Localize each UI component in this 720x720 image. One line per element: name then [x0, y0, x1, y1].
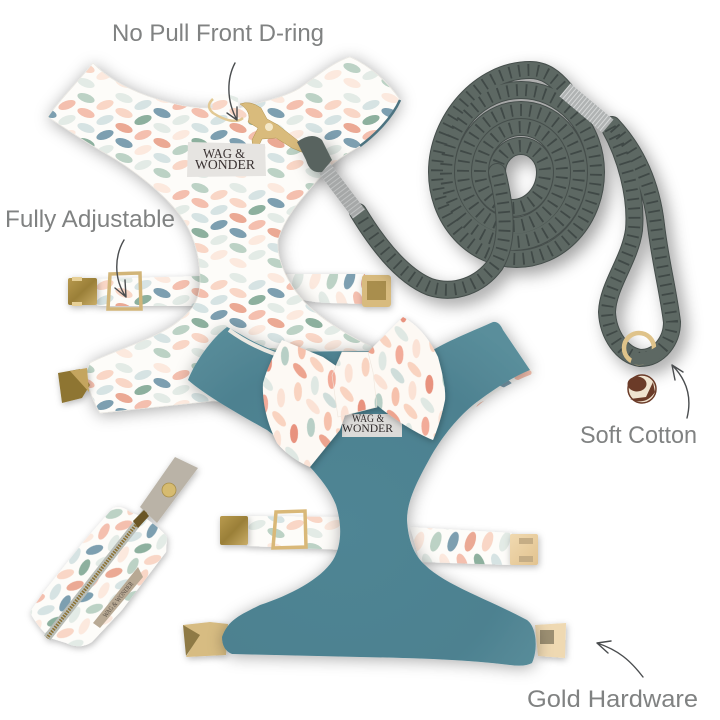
bow [263, 317, 445, 467]
zipper teeth [47, 512, 146, 638]
buckle: bottom left [183, 622, 228, 657]
snap stud [162, 483, 176, 497]
slider: lower left [273, 511, 306, 548]
buckle: upper left [68, 277, 97, 306]
callout: soft cotton [580, 365, 697, 449]
callout: gold hardware [527, 641, 698, 713]
tan pouch label: WAG & WONDER [101, 580, 135, 619]
rope: coil and handle base [437, 70, 596, 259]
callout: no pull front d-ring: No Pull Front D-ring [112, 20, 324, 47]
print lining sliver on right wing [468, 362, 535, 410]
rope: handle loop [607, 125, 672, 358]
buckle: lower right [510, 534, 538, 565]
ring and charm [624, 333, 662, 403]
velvet body [188, 322, 536, 666]
tan pouch label [93, 567, 143, 628]
zipper tape [47, 512, 146, 638]
arrow: to rope [672, 365, 689, 418]
callout: no pull front d-ring [112, 20, 324, 120]
callout: soft cotton: Soft Cotton [580, 422, 697, 449]
rope knot at clip [297, 136, 332, 172]
woven label under bow: WAG & [352, 411, 385, 425]
fabric loop [212, 94, 240, 132]
woven label under bow [342, 411, 402, 437]
harness body [48, 57, 400, 413]
rope: strand from harness across coil [358, 172, 505, 290]
woven label: top harness: WONDER [195, 158, 256, 173]
buckle: bottom right [535, 623, 566, 658]
silver wrap: near clip [322, 165, 359, 214]
arrow: to buckle [597, 641, 643, 677]
woven label: top harness: WAG & [203, 147, 245, 162]
callout: gold hardware: Gold Hardware [527, 686, 698, 713]
waste-bag pouch [30, 457, 198, 646]
callout: fully adjustable [5, 206, 175, 297]
cream lining at neck [229, 330, 275, 354]
strap: lower left [247, 516, 345, 550]
arrow: to slider [115, 240, 126, 297]
rope leash [297, 70, 672, 358]
strap: lower right [410, 527, 512, 565]
arrow: to d-ring [227, 63, 237, 120]
blue velvet harness [183, 322, 566, 666]
leather strap [140, 457, 198, 523]
bow: knot [332, 352, 377, 417]
D-ring [209, 99, 243, 121]
teal lining edge on right wing [360, 100, 400, 146]
bow: right wing [368, 317, 445, 440]
woven label: top harness [187, 142, 266, 177]
woven label under bow: WONDER [342, 421, 393, 435]
slider: upper left [108, 273, 141, 309]
bow: left wing [263, 340, 345, 467]
buckle: upper right [362, 275, 391, 307]
zipper pull [133, 510, 149, 528]
snap hook [240, 103, 311, 156]
gold ring [624, 333, 654, 363]
strap: left upper [97, 276, 200, 306]
silver wrap: handle [565, 90, 608, 126]
buckle: lower left [220, 516, 248, 545]
pouch body [30, 507, 167, 646]
D-ring and snap hook [209, 94, 311, 156]
top harness in printed fabric [48, 57, 400, 413]
rope passing through ring [632, 350, 662, 359]
strap: right upper [270, 274, 365, 304]
charm [628, 375, 656, 403]
buckle: lower left [58, 368, 90, 403]
callout: fully adjustable: Fully Adjustable [5, 206, 175, 233]
